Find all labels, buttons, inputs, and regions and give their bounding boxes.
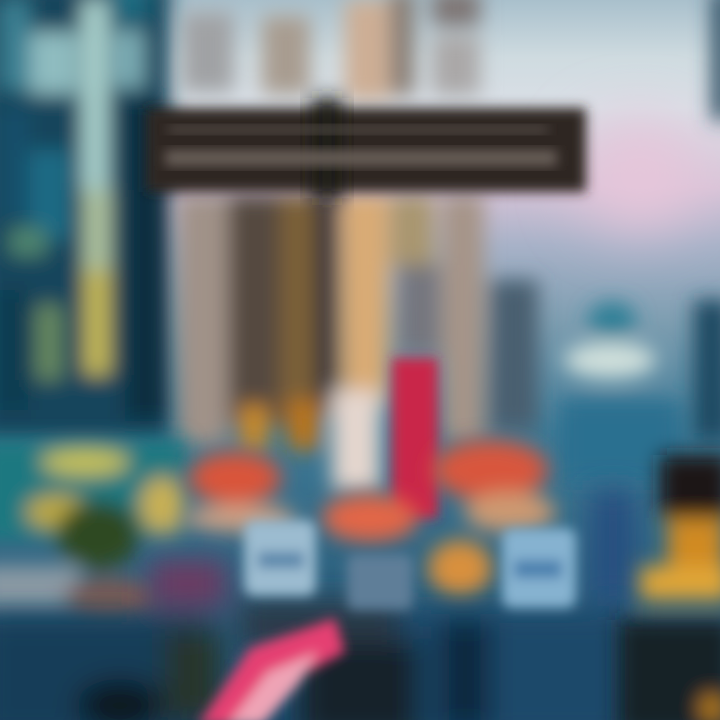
dark title banner: [146, 98, 586, 198]
center columns: [178, 195, 538, 490]
bottom street: [0, 490, 636, 720]
pink stripe: [198, 618, 345, 720]
right side scenery: [560, 0, 720, 480]
street band left: [0, 440, 185, 618]
top grey rooftops: [182, 0, 480, 100]
banner smudges: first line: [168, 126, 548, 133]
red column: [392, 358, 438, 518]
banner smudges: second line: [165, 150, 557, 166]
right orange storefront: [618, 455, 720, 720]
left towers: [0, 0, 170, 440]
vehicles: [244, 520, 576, 610]
orange flowers row: [184, 440, 556, 596]
